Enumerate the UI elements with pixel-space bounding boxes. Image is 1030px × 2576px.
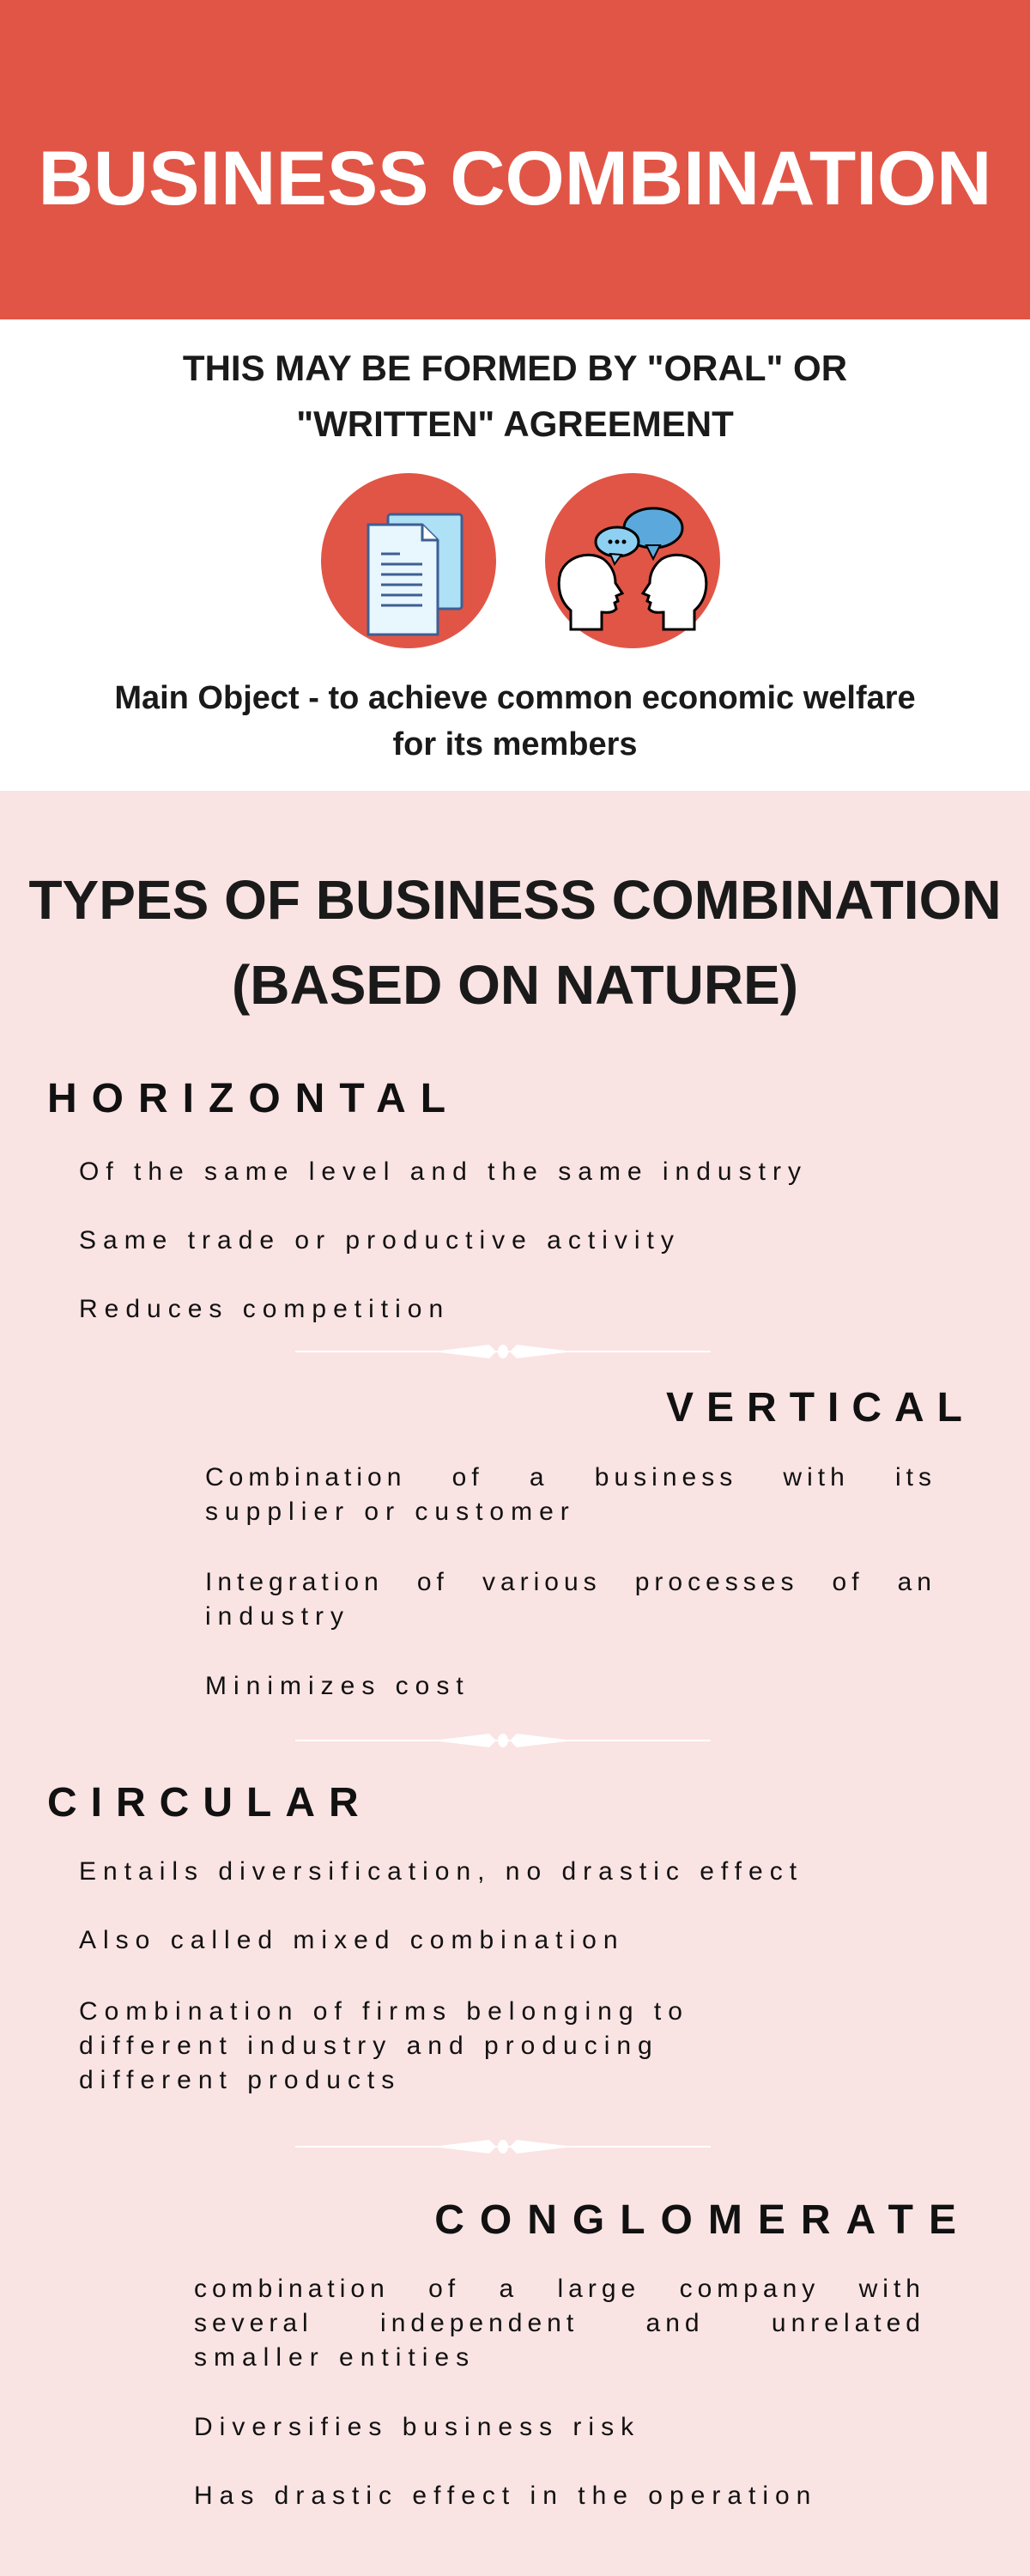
section heading: types: (BASED ON NATURE): [232, 954, 798, 1016]
list: circular points: Entails diversification, no drastic effect: [79, 1857, 803, 1886]
list: conglomerate points: Has drastic effect in the operation: [194, 2482, 817, 2510]
heading: vertical: VERTICAL: [666, 1385, 975, 1431]
list: circular points: Combination of firms belonging to: [79, 1997, 689, 2026]
section heading: types: TYPES OF BUSINESS COMBINATION: [28, 869, 1002, 931]
list: vertical points: Combination of a business with its: [205, 1463, 936, 1492]
divider: [295, 1734, 711, 1747]
list: vertical points: industry: [205, 1602, 350, 1631]
subtitle: [183, 348, 847, 444]
divider: [295, 1345, 711, 1358]
list: circular points: different products: [79, 2066, 401, 2094]
header banner: [0, 0, 1030, 319]
panel: horizontal: [47, 1076, 808, 1323]
list: conglomerate points: Diversifies business risk: [194, 2413, 640, 2441]
divider: [295, 2140, 711, 2154]
title: BUSINESS COMBINATION: [39, 135, 991, 221]
panel: conglomerate: [194, 2197, 972, 2510]
heading: circular: CIRCULAR: [47, 1780, 373, 1826]
main object text: for its members: [392, 726, 638, 762]
main object text: Main Object - to achieve common economic welfare: [114, 680, 916, 716]
panel: circular: [47, 1780, 803, 2094]
list: vertical points: Integration of various processes of an: [205, 1568, 936, 1596]
icon: oral conversation: [545, 473, 720, 648]
subtitle: "WRITTEN" AGREEMENT: [296, 404, 734, 444]
list: circular points: Also called mixed combination: [79, 1926, 625, 1954]
list: conglomerate points: [194, 2275, 925, 2510]
main object text: [114, 680, 916, 762]
list: conglomerate points: smaller entities: [194, 2343, 476, 2372]
list: circular points: [79, 1857, 803, 2094]
heading: conglomerate: CONGLOMERATE: [434, 2197, 972, 2243]
list: circular points: different industry and producing: [79, 2032, 659, 2060]
white intro panel: [0, 319, 1030, 791]
list: conglomerate points: several independent and unrelated: [194, 2309, 925, 2337]
list: horizontal points: Of the same level and the same industry: [79, 1157, 808, 1186]
subtitle: THIS MAY BE FORMED BY "ORAL" OR: [183, 348, 847, 388]
list: horizontal points: [79, 1157, 808, 1323]
list: vertical points: supplier or customer: [205, 1498, 576, 1526]
list: horizontal points: Same trade or productive activity: [79, 1226, 681, 1255]
icon: written document: [321, 473, 496, 648]
section heading: types: [28, 869, 1002, 1016]
list: horizontal points: Reduces competition: [79, 1295, 450, 1323]
list: conglomerate points: combination of a large company with: [194, 2275, 925, 2303]
panel: vertical: [205, 1385, 975, 1700]
list: vertical points: Minimizes cost: [205, 1672, 470, 1700]
heading: horizontal: HORIZONTAL: [47, 1076, 460, 1121]
list: vertical points: [205, 1463, 936, 1700]
